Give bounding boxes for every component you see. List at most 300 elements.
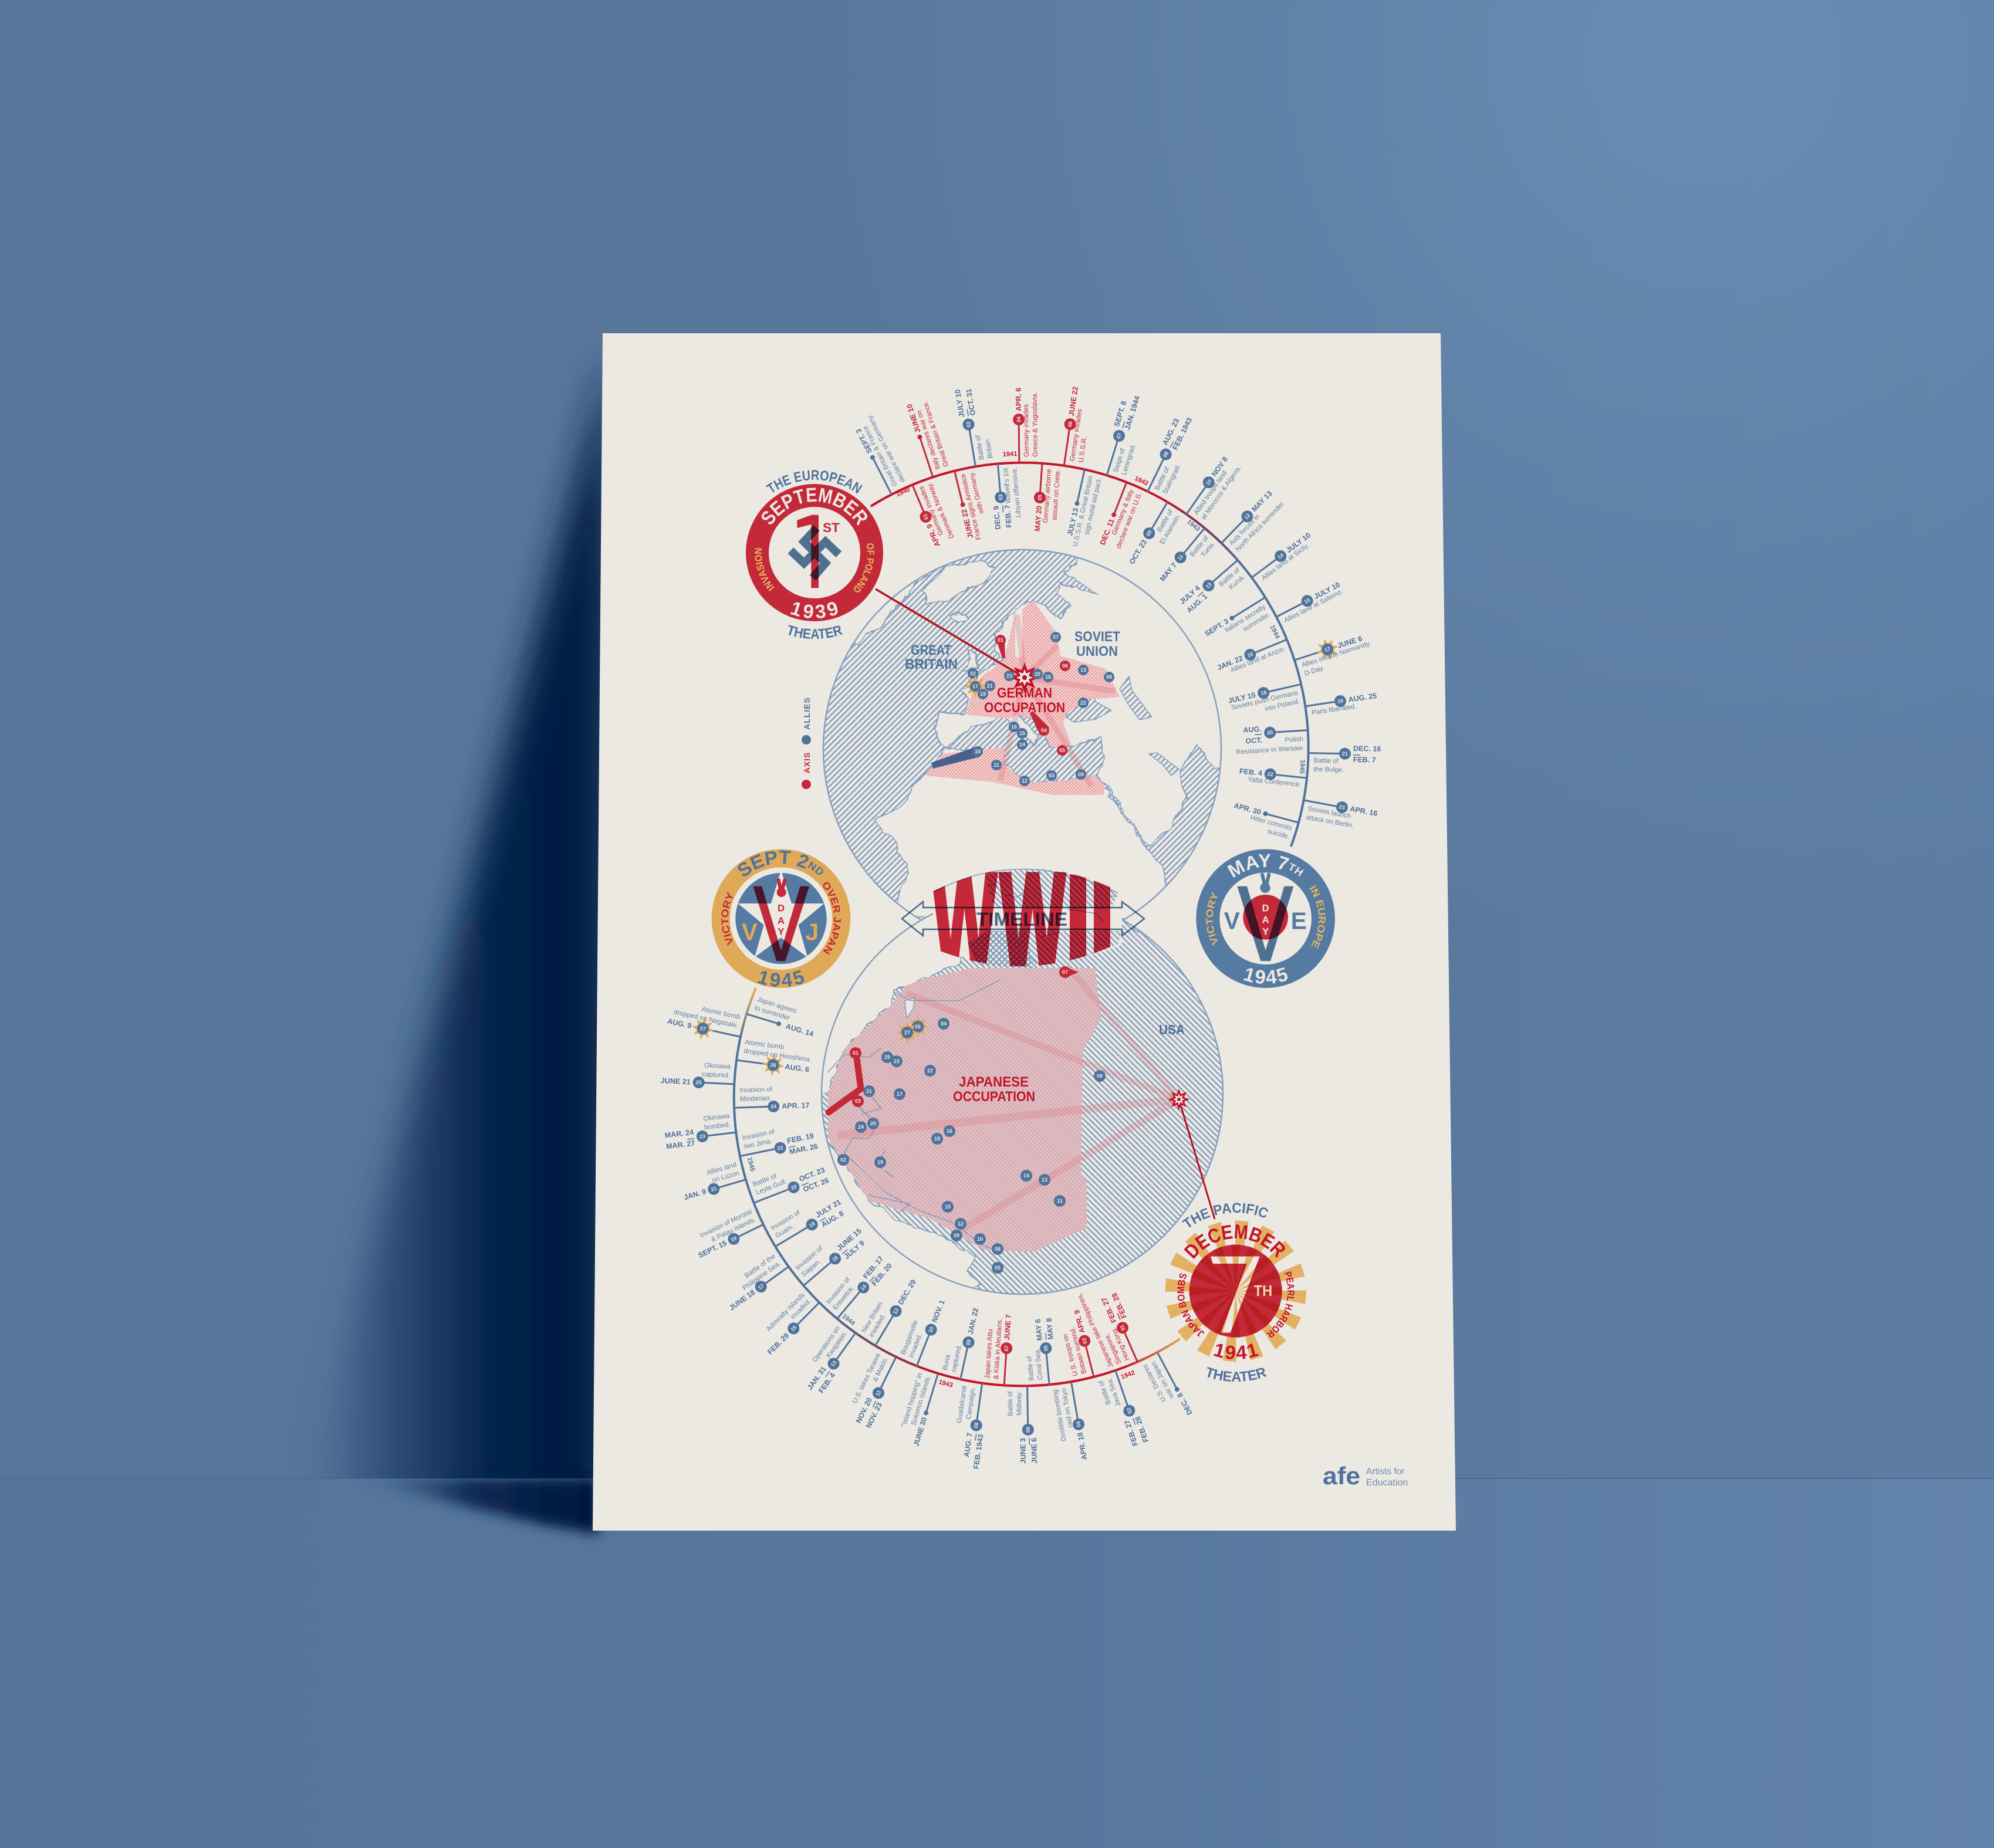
map markers: Pacific: 06 xyxy=(1097,1073,1103,1079)
event: Bougainville: Bougainville xyxy=(900,1319,920,1356)
event: Bataan xyxy=(1057,1308,1100,1382)
event: June 22 USSR: U.S.S.R. xyxy=(1077,436,1089,463)
event: Guadalcanal xyxy=(950,1380,992,1470)
map markers: Europe: 10 xyxy=(975,749,981,754)
event: Attu: Japan takes Attu xyxy=(984,1329,994,1379)
event: Tarawa: U.S. takes Tarawa xyxy=(851,1352,882,1404)
event: Attu: & Kiska in Aleutians. xyxy=(993,1318,1003,1380)
red sun xyxy=(1243,895,1288,940)
blue V xyxy=(1237,886,1293,961)
ring text: Sept 2nd: ND xyxy=(807,861,823,875)
event: Battle of Britain: Battle of xyxy=(975,434,986,461)
map markers: Europe: 15 xyxy=(1019,730,1025,736)
attack trail: Europe 10 xyxy=(931,746,980,769)
year labels: upper arc: 1941 xyxy=(1002,451,1017,458)
event: Berlin: attack on Berlin. xyxy=(1306,814,1354,830)
event: Okinawa captured: captured. xyxy=(702,1071,731,1079)
ring text: The European: THE EUROPEAN xyxy=(766,470,863,494)
event: Sept 3 1943: Italians secretly xyxy=(1224,604,1267,634)
event: Admiralty: 15 xyxy=(789,1324,797,1332)
event: Nagasaki: dropped on Nagasaki. xyxy=(673,1008,739,1030)
map markers: Pacific: 07 xyxy=(1062,969,1068,975)
letters V and J: J xyxy=(806,918,819,945)
connector: Pacific theatre to Pearl Harbor xyxy=(1179,1099,1215,1219)
event: Hiroshima: dropped on Hiroshima. xyxy=(743,1048,812,1064)
map label: German occupation: GERMAN xyxy=(997,685,1052,701)
map markers: Europe: 01 xyxy=(998,637,1003,643)
event: Okinawa captured: Okinawa xyxy=(704,1062,731,1071)
event: Guadalcanal: FEB. 1943 xyxy=(972,1434,985,1470)
event: Sept 3 1943 xyxy=(1204,594,1275,651)
ring text: Victory: VICTORY xyxy=(721,892,733,946)
ring text: Japan bombs: JAPAN BOMBS xyxy=(1168,1269,1208,1343)
event: Eniwetok: Invasion of xyxy=(825,1276,851,1306)
ring text: 1939: 1939 xyxy=(790,602,838,618)
ring text: Sept 2nd: SEPT 2 xyxy=(738,851,809,876)
red V xyxy=(753,886,809,961)
event: June 22 USSR: 06 xyxy=(1067,421,1073,428)
event: Berlin: APR. 16 xyxy=(1349,805,1378,818)
event: Island hopping: Solomon Islands. xyxy=(910,1375,932,1426)
event: Tunis xyxy=(1157,524,1220,593)
event: Guam: JULY 21 xyxy=(814,1198,843,1219)
event: Paris: AUG. 25 xyxy=(1348,692,1377,704)
event: Java Sea: Battle of xyxy=(1097,1379,1113,1405)
white star xyxy=(738,870,824,957)
event: Iwo Jima: Iwo Jima. xyxy=(743,1138,773,1150)
upper timeline arc xyxy=(871,463,1309,847)
ring text: Over Japan: OVER JAPAN xyxy=(820,879,843,956)
event: Stalingrad: 08 xyxy=(1162,451,1170,458)
poster cast shadow on wall xyxy=(325,361,602,1478)
map label: Great Britain xyxy=(905,642,958,672)
event: Morotai: 19 xyxy=(730,1235,738,1243)
event: Tunis: 11 xyxy=(1177,553,1185,561)
event: Nov 8: Allied troops land xyxy=(1193,470,1228,516)
event: July 15: 18 xyxy=(1260,689,1267,696)
event: Kursk xyxy=(1178,553,1251,622)
event: Eniwetok: Eniwetok. xyxy=(832,1284,856,1311)
event: Apr 30: suicide. xyxy=(1266,828,1290,841)
event: Coral Sea: Battle of xyxy=(1026,1355,1035,1381)
event: Admiralty: FEB. 29 xyxy=(766,1331,790,1356)
icon: peace hand xyxy=(1262,875,1269,891)
letters V and E: V xyxy=(1224,907,1240,934)
event: Bataan: U.S. troops on xyxy=(1062,1333,1079,1377)
event: May 13: 12 xyxy=(1243,512,1252,520)
map markers: Pacific: 08 xyxy=(995,1246,1001,1252)
timeline double arrow xyxy=(902,902,1144,936)
event: Java Sea xyxy=(1096,1368,1150,1451)
badge: V-E Day xyxy=(1196,849,1335,988)
event: July 15: JULY 15 xyxy=(1227,691,1256,705)
event: El Alamein: El Alamein. xyxy=(1159,513,1182,546)
event: Nov 8: 10 xyxy=(1205,478,1213,486)
event: Nov 8: at Morocco & Algeria. xyxy=(1200,465,1243,521)
event: El Alamein xyxy=(1126,499,1184,574)
event: Eniwetok: 14 xyxy=(859,1283,867,1292)
event: Midway: Battle of xyxy=(1007,1391,1014,1416)
event: Mindanao: Mindanao. xyxy=(740,1095,772,1103)
event: Kursk: Battle of xyxy=(1218,566,1242,588)
year labels: upper arc: 1943 xyxy=(1185,519,1201,533)
event: Kwajalein xyxy=(796,1321,863,1398)
event: Sicily: JULY 10 xyxy=(1285,531,1312,554)
event: Battle of Britain: Britain. xyxy=(984,437,994,459)
event: Iwo Jima xyxy=(736,1121,819,1166)
event: Dec 8: U.S. Declares xyxy=(1141,1363,1167,1403)
ring text: September: SEPTEMBER xyxy=(762,488,867,526)
year labels: upper arc: 1945 xyxy=(1298,759,1306,774)
event: Salerno: JULY 10 xyxy=(1313,581,1341,601)
icon: peace hand xyxy=(779,880,785,895)
event: Aug 14: Japan agrees xyxy=(756,996,797,1015)
floor background xyxy=(0,1478,1994,1848)
event: June 10: JUNE 10 xyxy=(905,403,922,434)
event: Leyte: OCT. 23 xyxy=(798,1166,826,1183)
event: Battle of Britain: OCT. 31 xyxy=(965,388,977,416)
event: Dec 8: DEC. 8 xyxy=(1175,1392,1194,1416)
event: July 13 xyxy=(1064,469,1104,549)
legend: axis and allies: AXIS xyxy=(802,752,812,773)
event: Salerno: Allies land at Salerno. xyxy=(1283,588,1344,624)
event: Sicily: 14 xyxy=(1276,552,1285,560)
event: Siege of Leningrad: 07 xyxy=(1116,432,1123,439)
event: June 22 armistice xyxy=(951,466,991,543)
event: El Alamein: Battle of xyxy=(1156,508,1175,533)
ordinal ST: ST xyxy=(823,520,840,535)
event: Dec 9 xyxy=(988,462,1023,530)
map markers: Pacific: 22 xyxy=(927,1068,933,1074)
ring text: In Europe: IN EUROPE xyxy=(1307,883,1329,950)
event: Philippine Sea: Philippine Sea. xyxy=(741,1260,782,1292)
event: Morotai: & Palau Islands. xyxy=(710,1216,757,1244)
event: Apr 9 xyxy=(907,477,957,549)
Day letters: D xyxy=(778,902,785,913)
map markers: Pacific: 02 xyxy=(840,1157,846,1163)
event: Dec 9: Wavell's 1st xyxy=(1002,467,1012,503)
event: Sicily xyxy=(1248,530,1316,587)
ring text: 1945: 1945 xyxy=(1241,963,1290,988)
ring text: Invasion: INVASION xyxy=(755,548,775,591)
upper globe: Europe map xyxy=(823,549,1222,920)
map markers: Pacific: 05 xyxy=(995,1265,1001,1271)
event: Java Sea: 02 xyxy=(1126,1407,1133,1414)
event: Dec 11: DEC. 11 xyxy=(1099,517,1116,546)
WWII title lettering: W xyxy=(1000,844,1065,1001)
map markers: Europe: 06 xyxy=(1062,663,1068,669)
WWII title lettering: I xyxy=(1086,844,1118,1001)
event: Tunis: Battle of xyxy=(1189,534,1210,559)
event: June 22 armistice: JUNE 22 xyxy=(960,508,975,539)
badge: European theatre, September 1st 1939 xyxy=(746,468,883,642)
event: Sept 3 1943: surrender. xyxy=(1242,611,1272,633)
attack trail: Europe 01 xyxy=(996,640,1005,658)
map label: USA: USA xyxy=(1159,1022,1185,1037)
event: Anzio: Allies land at Anzio. xyxy=(1229,645,1286,674)
event: May 13: North Africa surrender. xyxy=(1235,500,1286,553)
event: Dec 11 xyxy=(1099,481,1145,552)
event: Okinawa bombed: 23 xyxy=(699,1133,705,1140)
event: Kwajalein: Operations on xyxy=(812,1325,841,1363)
event: Sept 3 1943: SEPT. 3 xyxy=(1204,617,1230,638)
event: Siege of Leningrad: Seige of xyxy=(1113,447,1127,473)
event: July 15: into Poland. xyxy=(1264,698,1300,713)
event: Kursk: AUG. 1 xyxy=(1185,592,1209,615)
event: Stalingrad xyxy=(1139,411,1203,500)
Day letters: Y xyxy=(778,926,785,937)
event: Island hopping: JUNE 30 xyxy=(912,1416,928,1447)
event: Feb 27 Japanese xyxy=(1076,1280,1147,1374)
event: Guadalcanal: Campaign. xyxy=(965,1386,977,1420)
event: Feb 27 Japanese: 01 xyxy=(1118,1324,1127,1332)
event: Dec 9: 03 xyxy=(998,494,1004,500)
event: Apr 9: Germany invades xyxy=(918,485,945,536)
event: Warsaw: OCT. xyxy=(1245,736,1262,745)
map label: Great Britain: GREAT xyxy=(911,642,951,658)
event: May 20: assault on Crete. xyxy=(1051,469,1062,520)
event: Apr 9: 01 xyxy=(922,513,930,520)
event: Leyte xyxy=(746,1155,830,1212)
event: Okinawa bombed: bombed. xyxy=(704,1121,731,1131)
event: Okinawa bombed xyxy=(663,1112,737,1150)
legend: axis and allies: ALLIES xyxy=(802,697,812,730)
event: June 10: Great Britain & France. xyxy=(922,400,950,468)
event: Coral Sea: 05 xyxy=(1043,1345,1049,1352)
event: Saipan: JULY 9 xyxy=(843,1239,866,1261)
event: Aug 14 xyxy=(745,994,819,1038)
Japanese invasion arrows xyxy=(838,974,1179,1229)
logo: Artists for Education xyxy=(1323,1462,1408,1490)
event: Apr 6 xyxy=(1013,387,1039,463)
event: Buna xyxy=(940,1304,982,1381)
event: Apr 30: APR. 30 xyxy=(1233,801,1262,817)
event: Okinawa captured xyxy=(661,1060,735,1090)
map markers: Europe: 05 xyxy=(1059,747,1065,753)
event: Sept 3: SEPT. 3 xyxy=(854,427,874,455)
event: Siege of Leningrad: SEPT. 8 xyxy=(1113,400,1128,428)
event: Okinawa bombed: MAR. 27 xyxy=(665,1139,695,1150)
poster sheet xyxy=(593,333,1456,1531)
event: Sicily: Allies land at Sicily. xyxy=(1260,542,1310,582)
event: Anzio: JAN. 22 xyxy=(1216,654,1244,672)
event: Saipan: Saipan. xyxy=(800,1258,822,1278)
event: Nagasaki xyxy=(665,999,745,1048)
event: Java Sea: FEB. 27 xyxy=(1123,1419,1140,1447)
ring text: of Poland: OF POLAND xyxy=(854,543,874,593)
event: Bataan: 03 xyxy=(1081,1337,1088,1345)
event: Apr 30: Hitler commits xyxy=(1249,814,1293,832)
event: Guam: 18 xyxy=(808,1220,816,1228)
event: Siege of Leningrad xyxy=(1098,392,1151,482)
event: Morotai: Invasion of Morotai xyxy=(699,1208,753,1240)
event: July 15: Soviets push Germans xyxy=(1231,689,1299,712)
event: Luzon xyxy=(678,1160,748,1203)
map markers: Pacific: 23 xyxy=(894,1058,900,1064)
event: Luzon: on Luzon xyxy=(711,1170,740,1184)
event: Attu: 07 xyxy=(1003,1345,1009,1351)
event: Doolittle: APR. 18 xyxy=(1076,1431,1089,1460)
event: Dec 11: declare war on U.S. xyxy=(1115,492,1143,549)
map markers: Europe: 04 xyxy=(1041,727,1047,733)
event: Admiralty xyxy=(754,1288,823,1358)
map markers: Europe: 18 xyxy=(1045,674,1051,680)
event: Leyte: Leyte Gulf. xyxy=(755,1178,788,1196)
event: New Britain: DEC. 29 xyxy=(897,1278,918,1306)
year labels: upper arc: 1940 xyxy=(895,486,911,498)
event: Buna: captured. xyxy=(950,1344,963,1373)
map markers: Europe: 12 xyxy=(1022,778,1028,784)
event: Battle of Britain: JULY 10 xyxy=(954,389,966,418)
event: Guam: Guam. xyxy=(774,1223,795,1240)
event: Tunis: MAY 7 xyxy=(1158,561,1178,583)
event: Mindanao: Invasion of xyxy=(739,1086,773,1094)
map markers: Pacific: 18 xyxy=(934,1136,940,1142)
map markers: Pacific: 10 xyxy=(977,1236,983,1242)
blast marker: Pearl Harbor xyxy=(1171,1091,1187,1108)
map markers: Europe xyxy=(964,632,1114,786)
year labels: upper arc xyxy=(895,451,1306,774)
year labels: lower arc: 1943 xyxy=(938,1379,954,1389)
event: Admiralty: Admiralty Islands xyxy=(765,1291,806,1333)
event: Hiroshima: Atomic bomb xyxy=(745,1039,785,1051)
event: Leyte: 20 xyxy=(790,1183,797,1191)
ring text: 1941: 1941 xyxy=(1211,1338,1260,1363)
event: Bulge: the Bulge. xyxy=(1313,766,1344,774)
event: D-Day: D-Day. xyxy=(1303,665,1325,678)
map markers: Pacific: 14 xyxy=(1023,1173,1029,1179)
event: Guadalcanal: Guadalcanal xyxy=(956,1385,968,1424)
event: Philippine Sea xyxy=(718,1250,792,1314)
event: Apr 9: Denmark & Norway. xyxy=(926,482,956,540)
event: Luzon: JAN. 9 xyxy=(683,1187,707,1201)
Day letters: A xyxy=(1262,914,1269,925)
event: Buna: Buna xyxy=(942,1353,952,1371)
event: Saipan xyxy=(790,1219,870,1293)
event: Warsaw: Resistance in Warsaw. xyxy=(1236,744,1304,756)
event: Apr 6: Greece & Yugoslavia. xyxy=(1032,392,1039,457)
event: Philippine Sea: Battle of the xyxy=(743,1253,777,1280)
event: New Britain: New Britain xyxy=(860,1301,884,1334)
Day letters: Y xyxy=(1262,926,1269,937)
event: May 13: Axis forces in xyxy=(1228,513,1261,547)
event: Stalingrad: FEB. 1943 xyxy=(1171,416,1194,451)
event: Midway xyxy=(1007,1386,1039,1464)
event: Buna: 09 xyxy=(965,1339,972,1346)
event: Anzio xyxy=(1215,634,1290,678)
map label: Soviet Union: SOVIET xyxy=(1074,629,1120,645)
event: Berlin xyxy=(1300,794,1378,834)
event: Philippine Sea: JUNE 18 xyxy=(728,1288,756,1312)
event: Philippine Sea: 17 xyxy=(757,1282,765,1291)
event: Midway: JUNE 3 xyxy=(1019,1438,1028,1464)
ordinal TH: TH xyxy=(1254,1282,1272,1299)
event: Doolittle: 04 xyxy=(1075,1421,1082,1428)
event: Island hopping: "Island hopping" in xyxy=(901,1372,924,1427)
event: Doolittle: raid on Tokyo xyxy=(1060,1387,1074,1428)
event: Kwajalein: 13 xyxy=(830,1359,837,1368)
event: Bougainville: NOV. 1 xyxy=(930,1299,947,1324)
event: Guam xyxy=(765,1188,849,1255)
event: Iwo Jima: 22 xyxy=(777,1145,784,1152)
event: Guam: AUG. 8 xyxy=(820,1209,845,1229)
ring text: Pearl Harbor: PEARL HARBOR xyxy=(1263,1268,1304,1343)
event: Warsaw: Polish xyxy=(1285,736,1303,744)
map markers: Pacific xyxy=(837,966,1106,1274)
event: Dec 11: Germany & Italy xyxy=(1111,488,1135,536)
event: Java Sea: FEB. 28 xyxy=(1134,1415,1150,1443)
event: May 20 xyxy=(1032,463,1062,533)
event: Bulge: 21 xyxy=(1342,751,1348,757)
event: Iwo Jima: MAR. 26 xyxy=(789,1142,819,1156)
attack trail: Europe 04 xyxy=(1030,711,1049,736)
event: June 10 xyxy=(905,398,952,479)
badge: Pacific theatre, December 7th 1941 xyxy=(1165,1203,1306,1382)
event: July 13: JULY 13 xyxy=(1066,507,1080,536)
Day letters: A xyxy=(778,915,785,926)
event: El Alamein: 09 xyxy=(1145,529,1153,537)
ring text: Theater: THEATER xyxy=(789,625,843,639)
event: Saipan: Invasion of xyxy=(795,1245,824,1272)
map markers: Pacific: 04 xyxy=(941,1021,947,1027)
event: June 22 armistice: France signs Armistice xyxy=(959,473,982,540)
event: Feb 27 Japanese: FEB. 27 xyxy=(1100,1296,1118,1324)
event: Paris: Paris liberated. xyxy=(1312,703,1357,716)
event: Guam: Invasion of xyxy=(770,1209,802,1232)
historical swastika emblem xyxy=(790,528,839,578)
year labels: upper arc: 1944 xyxy=(1269,624,1281,641)
event: Saipan: JUNE 15 xyxy=(835,1227,863,1253)
event: Kwajalein: Kwajalein. xyxy=(825,1330,849,1359)
event: Tarawa xyxy=(844,1348,905,1430)
event: New Britain: 12 xyxy=(892,1307,900,1315)
sunburst wedges xyxy=(1189,1245,1282,1338)
letters V and J: V xyxy=(742,918,758,945)
event: Bataan: Bataan surrend. xyxy=(1069,1326,1088,1375)
event: Yalta: FEB. 4 xyxy=(1239,767,1263,777)
event: Tarawa: NOV. 23 xyxy=(864,1401,884,1430)
event: New Britain: invaded. xyxy=(868,1313,887,1339)
ring text: Theater: THEATER xyxy=(1204,1365,1268,1385)
event: Nagasaki: Atomic bomb xyxy=(701,1006,741,1021)
ring text: The Pacific: THE PACIFIC xyxy=(1178,1195,1272,1233)
wall background xyxy=(0,0,1994,1478)
event: Island hopping xyxy=(896,1368,942,1447)
event: Salerno xyxy=(1273,579,1344,627)
lower globe: Pacific map xyxy=(786,839,1239,1306)
event: Eniwetok xyxy=(822,1247,894,1325)
event: Okinawa bombed: Okinawa xyxy=(703,1112,730,1123)
map markers: Pacific: 09 xyxy=(954,1233,959,1238)
year labels: lower arc: 1944 xyxy=(840,1312,857,1328)
event: Admiralty: invaded. xyxy=(790,1298,813,1321)
event: Feb 27 Japanese: Singapore, xyxy=(1103,1332,1123,1365)
event: Buna: JAN. 22 xyxy=(966,1307,980,1335)
event: Yalta xyxy=(1238,765,1307,789)
event: Leyte: Battle of xyxy=(752,1172,778,1188)
event: June 10: Italy declares war on xyxy=(915,409,942,471)
event: Kwajalein: JAN. 31 xyxy=(806,1365,828,1392)
event: Tarawa: & Makin. xyxy=(872,1356,890,1383)
badge: V-J Day xyxy=(712,847,850,991)
event: Mindanao: 24 xyxy=(770,1104,776,1109)
map markers: Europe: 02 xyxy=(970,671,976,676)
map markers: Pacific: 15 xyxy=(945,1204,951,1210)
Pacific theatre timeline events xyxy=(661,994,1194,1470)
map markers: Europe: 07 xyxy=(1053,634,1059,640)
German invasion arrows xyxy=(1001,615,1115,786)
event: Kursk: Kursk. xyxy=(1228,573,1247,591)
